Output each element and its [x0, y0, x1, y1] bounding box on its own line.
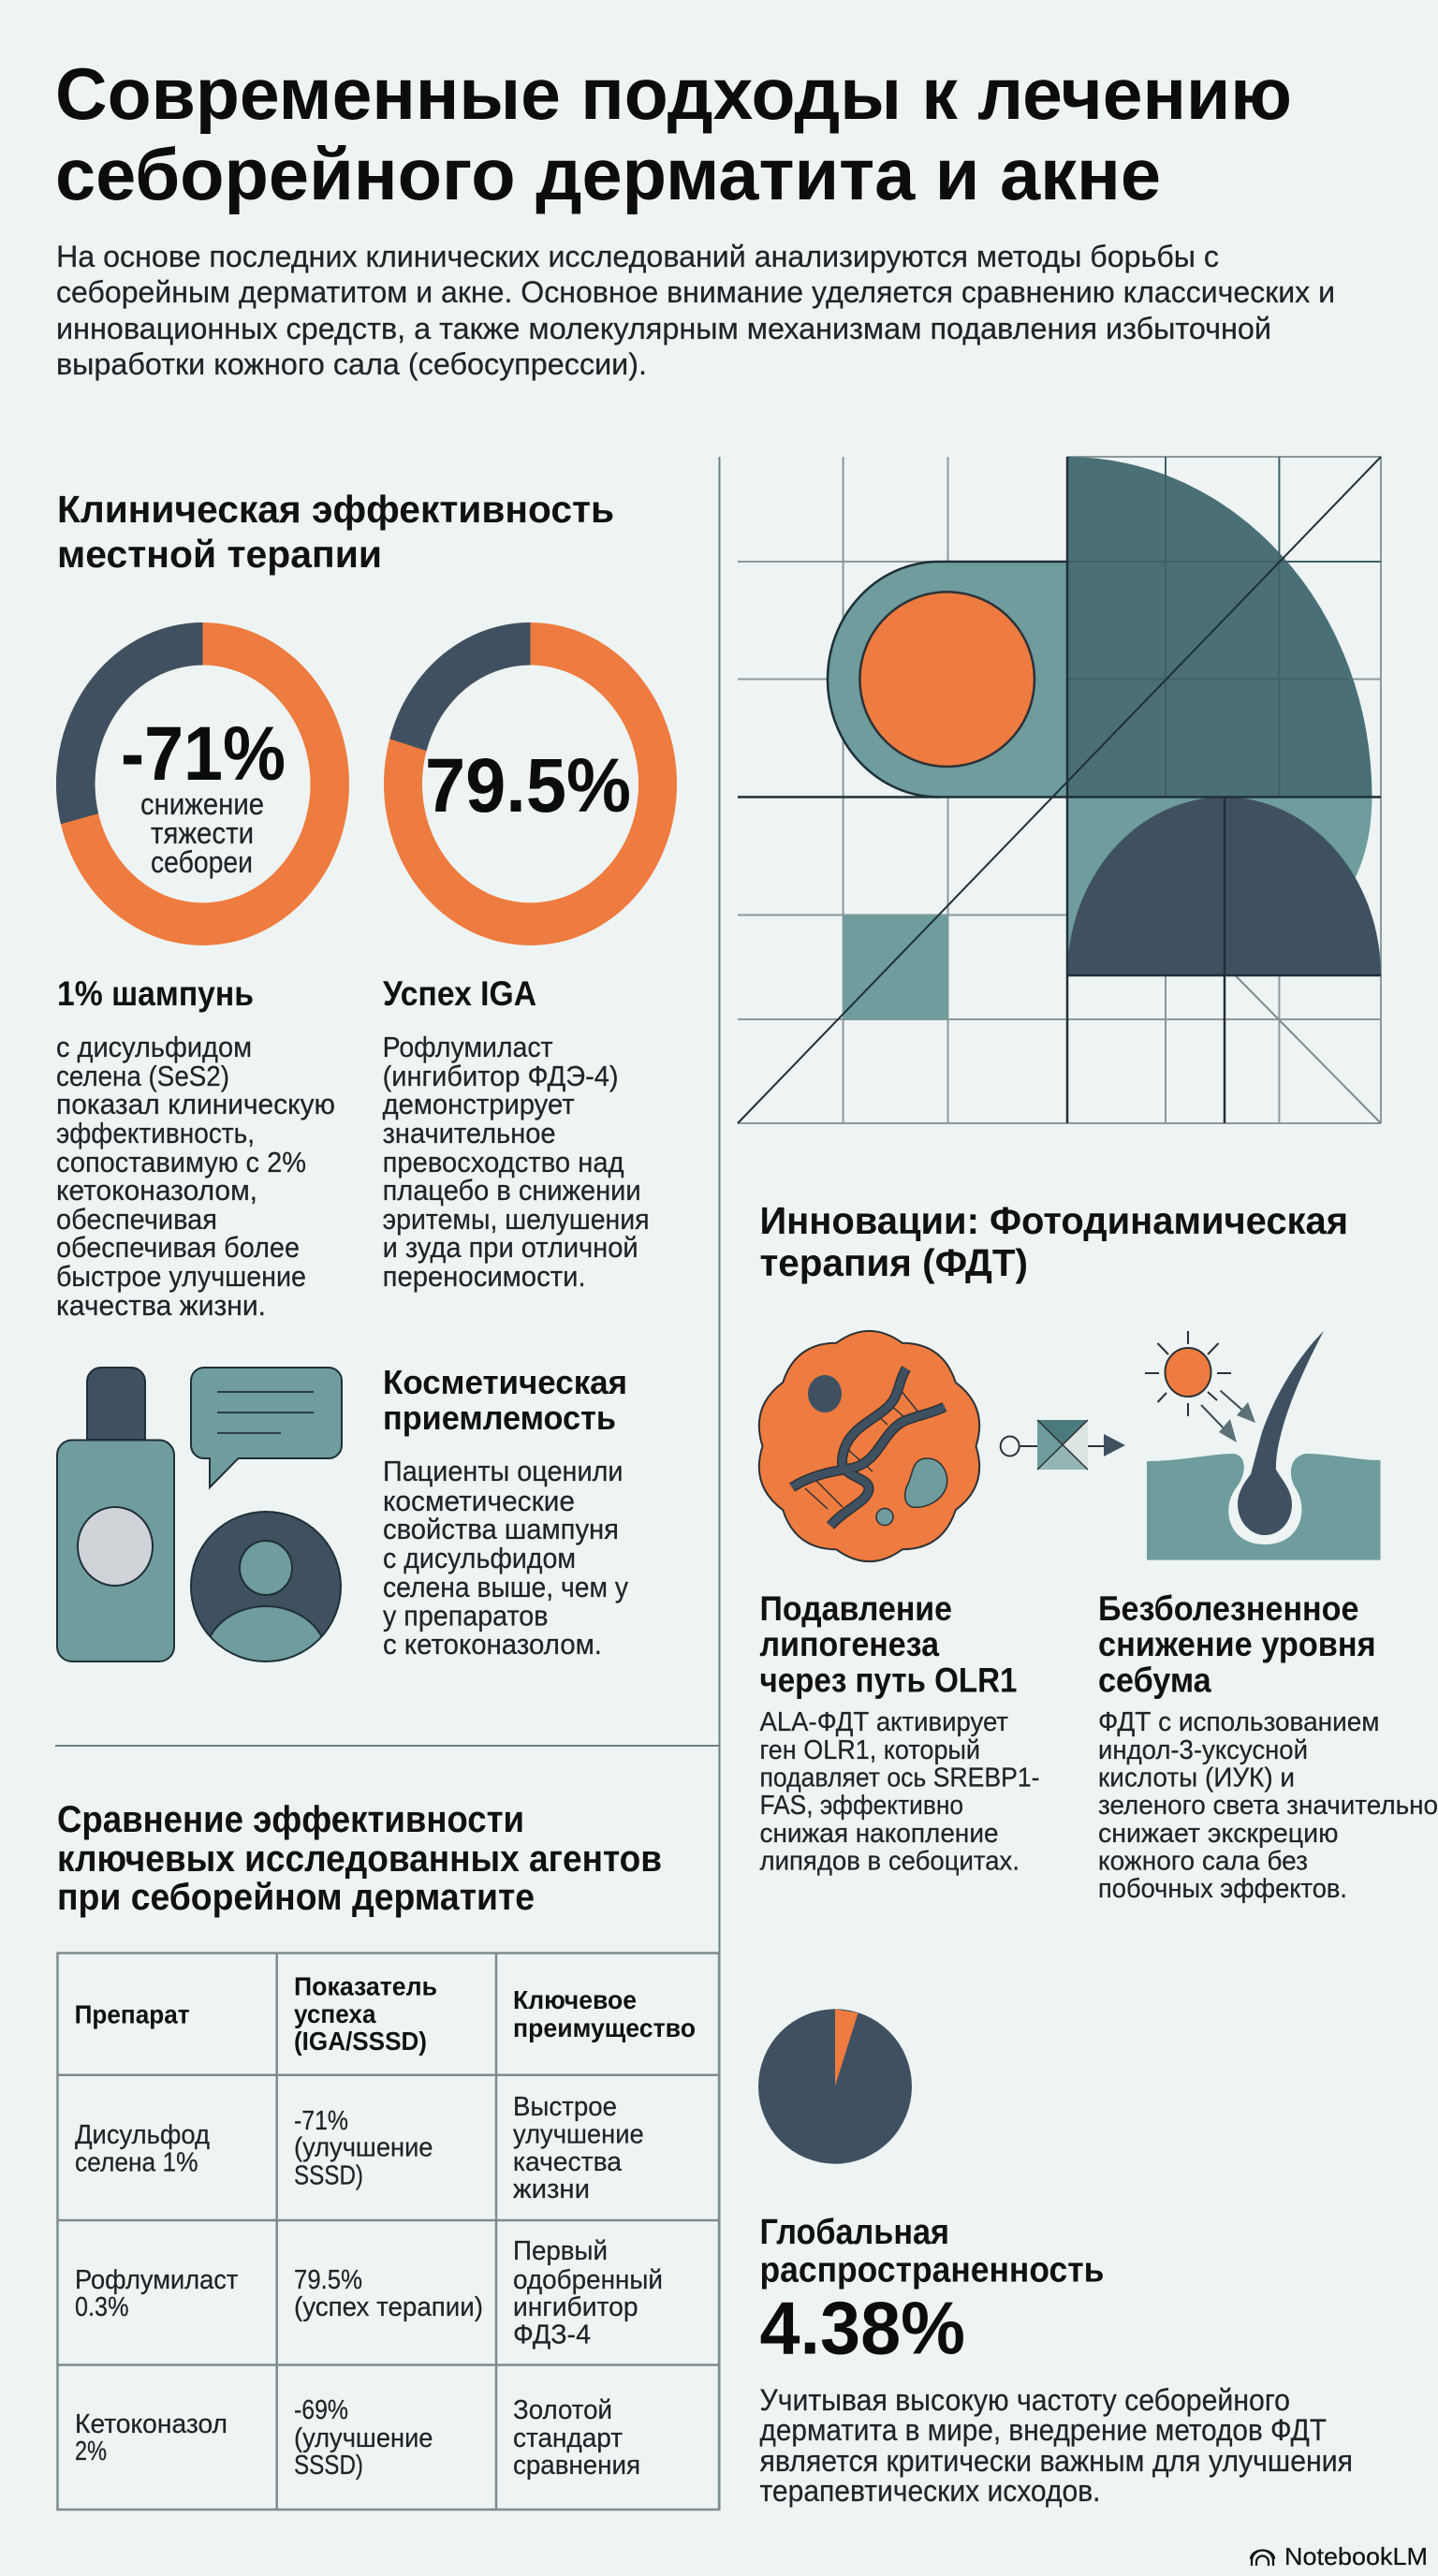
table row: roflumilast — [75, 2236, 663, 2349]
table row: ketoconazole: SSSD) — [294, 2451, 363, 2481]
donut chart: -71%: снижение — [140, 787, 264, 821]
heading: comparison: при себорейном дерматите — [57, 1877, 535, 1918]
text block: cosmetic acceptability: свойства шампуня — [383, 1513, 619, 1545]
text block: cosmetic acceptability: Пациенты оценили — [383, 1455, 624, 1487]
heading: cosmetic acceptability — [383, 1363, 627, 1437]
title: себорейного дерматита и акне — [55, 133, 1161, 215]
stat text: IGA success: превосходство над — [383, 1146, 624, 1178]
table header row: преимущество — [513, 2013, 696, 2042]
stat text: 1% shampoo: 1% шампунь — [57, 974, 254, 1013]
heading: global prevalence — [760, 2213, 1104, 2291]
table header row — [75, 1971, 696, 2056]
text: lipogenesis suppression: подавляет ось SREBP1- — [760, 1764, 1039, 1793]
stat text: 1% shampoo: быстрое улучшение — [56, 1260, 306, 1293]
donut chart: 79.5% — [384, 622, 677, 945]
table row: roflumilast: (успех терапии) — [294, 2292, 483, 2322]
text: painless sebum reduction — [1098, 1589, 1438, 1904]
table row: ketoconazole: сравнения — [513, 2451, 640, 2481]
text block: global prevalence — [760, 2383, 1353, 2508]
donut chart: 79.5%: 79.5% — [425, 743, 631, 828]
icon: shampoo bottle — [57, 1368, 174, 1661]
stat text: 1% shampoo: селена (SeS2) — [56, 1060, 229, 1092]
subtitle text block — [56, 240, 1335, 381]
panel: comparison table — [57, 1799, 719, 2510]
title — [55, 52, 1292, 215]
table row: ketoconazole: Кетоконазол — [75, 2409, 227, 2439]
donut chart: -71%: себореи — [151, 845, 253, 879]
icon: speech bubble — [191, 1368, 342, 1487]
table row: ketoconazole: 2% — [75, 2437, 107, 2466]
text block: cosmetic acceptability — [383, 1455, 628, 1661]
stat text: IGA success: значительное — [383, 1117, 556, 1149]
table row: selenium disulfide: Выстрое — [513, 2092, 617, 2122]
pie chart: 4.38% — [758, 2009, 912, 2164]
stat text: IGA success: эритемы, шелушения — [383, 1203, 650, 1236]
stat text: 1% shampoo: эффективность, — [56, 1117, 255, 1149]
text: painless sebum reduction: снижение уровня — [1098, 1625, 1376, 1663]
panel: clinical efficacy — [56, 488, 677, 1322]
text block: cosmetic acceptability: косметические — [383, 1485, 575, 1517]
text: lipogenesis suppression: ALA-ФДТ активирует — [760, 1707, 1008, 1737]
subtitle text block: выработки кожного сала (себосупрессии). — [56, 347, 647, 381]
heading: cosmetic acceptability: Косметическая — [383, 1363, 627, 1401]
donut chart: -71%: тяжести — [151, 816, 254, 850]
table row: selenium disulfide: (улучшение — [294, 2133, 433, 2163]
big stat: 4.38%: 4.38% — [760, 2286, 965, 2370]
stat text: 1% shampoo: качества жизни. — [56, 1289, 266, 1322]
table row: selenium disulfide: жизни — [513, 2174, 590, 2204]
table row: ketoconazole — [75, 2395, 640, 2481]
heading: clinical efficacy — [57, 488, 614, 576]
stat text: 1% shampoo: обеспечивая более — [56, 1231, 300, 1264]
heading: comparison: Сравнение эффективности — [57, 1799, 524, 1840]
stat text: 1% shampoo: обеспечивая — [56, 1203, 217, 1236]
table row: selenium disulfide: Дисульфод — [75, 2120, 210, 2150]
table header row: (IGA/SSSD) — [294, 2027, 427, 2056]
table row: selenium disulfide — [75, 2092, 644, 2204]
text: lipogenesis suppression: липядов в себоцитах. — [760, 1846, 1020, 1876]
text block: global prevalence: Учитывая высокую частоту себорейного — [760, 2383, 1290, 2417]
table row: roflumilast: Рофлумиласт — [75, 2265, 238, 2295]
text: lipogenesis suppression: Подавление — [760, 1589, 952, 1628]
title: Современные подходы к лечению — [55, 52, 1292, 135]
text: lipogenesis suppression: ген OLR1, который — [760, 1735, 980, 1765]
table row: ketoconazole: Золотой — [513, 2395, 612, 2425]
text: lipogenesis suppression: через путь OLR1 — [760, 1661, 1017, 1700]
text: painless sebum reduction: снижает экскрецию — [1098, 1819, 1339, 1849]
icon: sun and hair follicle — [1145, 1331, 1380, 1560]
stat text: IGA success: демонстрирует — [383, 1088, 575, 1120]
heading: innovations PDT — [760, 1199, 1348, 1284]
stat text: IGA success: и зуда при отличной — [383, 1231, 638, 1264]
table row: selenium disulfide: SSSD) — [294, 2161, 363, 2191]
table row: selenium disulfide: качества — [513, 2147, 623, 2177]
heading: comparison — [57, 1799, 662, 1918]
table row: ketoconazole: стандарт — [513, 2423, 623, 2453]
table header row: Ключевое — [513, 1985, 637, 2014]
table row: roflumilast: 79.5% — [294, 2265, 362, 2295]
donut chart: -71% — [56, 622, 349, 945]
text block: cosmetic acceptability: селена выше, чем у — [383, 1571, 628, 1603]
subtitle text block: инновационных средств, а также молекулярным механизмам подавления избыточной — [56, 312, 1271, 345]
panel: global prevalence — [758, 2009, 1353, 2508]
donut chart: -71%: -71% — [121, 711, 286, 797]
heading: global prevalence: распространенность — [760, 2251, 1104, 2291]
text block: cosmetic acceptability: с кетоконазолом. — [383, 1628, 602, 1661]
text: painless sebum reduction: кожного сала без — [1098, 1846, 1308, 1876]
subtitle text block: На основе последних клинических исследований анализируются методы борьбы с — [56, 240, 1219, 273]
stat text: IGA success: плацебо в снижении — [383, 1174, 641, 1207]
geometric abstract illustration — [738, 457, 1381, 1123]
stat text: 1% shampoo: показал клиническую — [56, 1088, 335, 1120]
text: painless sebum reduction: ФДТ с использованием — [1098, 1707, 1380, 1737]
text block: global prevalence: дерматита в мире, внедрение методов ФДТ — [760, 2413, 1327, 2447]
table row: selenium disulfide: -71% — [294, 2106, 348, 2136]
subtitle text block: себорейным дерматитом и акне. Основное внимание уделяется сравнению классических и — [56, 275, 1335, 309]
table row: roflumilast: ФДЗ-4 — [513, 2320, 591, 2349]
arrow: process connector — [1001, 1420, 1125, 1470]
text: painless sebum reduction: себума — [1098, 1661, 1211, 1700]
stat text: IGA success: Рофлумиласт — [383, 1031, 553, 1063]
text: painless sebum reduction: Безболезненное — [1098, 1589, 1359, 1628]
text block: cosmetic acceptability: с дисульфидом — [383, 1542, 576, 1574]
table row: selenium disulfide: селена 1% — [75, 2147, 198, 2177]
table row: roflumilast: Первый — [513, 2236, 608, 2266]
stat text: 1% shampoo: сопоставимую с 2% — [56, 1146, 306, 1178]
heading: innovations PDT: Инновации: Фотодинамическая — [760, 1199, 1348, 1242]
panel: cosmetic acceptability — [56, 1367, 629, 1662]
stat text: IGA success: переносимости. — [383, 1260, 586, 1293]
table row: ketoconazole: (улучшение — [294, 2423, 433, 2453]
text block: global prevalence: терапевтических исходов. — [760, 2474, 1101, 2508]
table row: roflumilast: 0.3% — [75, 2292, 129, 2322]
table row: ketoconazole: -69% — [294, 2395, 348, 2425]
table header row: Показатель — [294, 1971, 437, 2001]
heading: clinical efficacy: Клиническая эффективность — [57, 488, 614, 531]
panel: photodynamic therapy — [759, 1199, 1438, 1904]
stat text: 1% shampoo: кетоконазолом, — [56, 1174, 257, 1207]
text: lipogenesis suppression: липогенеза — [760, 1625, 939, 1663]
table header row: успеха — [294, 1999, 376, 2028]
icon: patient avatar — [190, 1511, 342, 1662]
stat text: 1% shampoo — [56, 974, 335, 1322]
table row: selenium disulfide: улучшение — [513, 2119, 644, 2149]
text block: cosmetic acceptability: у препаратов — [383, 1599, 549, 1632]
stat text: IGA success: Успех IGA — [383, 974, 536, 1013]
text: painless sebum reduction: побочных эффектов. — [1098, 1874, 1347, 1904]
text: lipogenesis suppression: снижая накопление — [760, 1819, 998, 1849]
heading: innovations PDT: терапия (ФДТ) — [760, 1241, 1028, 1284]
text: lipogenesis suppression: FAS, эффективно — [760, 1791, 963, 1821]
heading: clinical efficacy: местной терапии — [57, 533, 382, 576]
text block: global prevalence: является критически важным для улучшения — [760, 2444, 1353, 2478]
table grid — [58, 1953, 719, 2510]
text: painless sebum reduction: индол-3-уксусной — [1098, 1735, 1308, 1765]
icon: sebocyte cell with DNA — [759, 1331, 979, 1561]
stat text: IGA success — [383, 974, 650, 1293]
heading: cosmetic acceptability: приемлемость — [383, 1398, 616, 1437]
table header row: Препарат — [75, 1999, 190, 2029]
stat text: 1% shampoo: с дисульфидом — [56, 1031, 252, 1063]
stat text: IGA success: (ингибитор ФДЭ-4) — [383, 1060, 619, 1092]
heading: global prevalence: Глобальная — [760, 2213, 949, 2252]
table row: roflumilast: ингибитор — [513, 2292, 638, 2322]
text: lipogenesis suppression — [760, 1589, 1039, 1876]
logo: NotebookLM: NotebookLM — [1284, 2542, 1428, 2570]
text: painless sebum reduction: кислоты (ИУК) и — [1098, 1764, 1295, 1793]
heading: comparison: ключевых исследованных агентов — [57, 1838, 662, 1880]
table row: roflumilast: одобренный — [513, 2265, 663, 2295]
